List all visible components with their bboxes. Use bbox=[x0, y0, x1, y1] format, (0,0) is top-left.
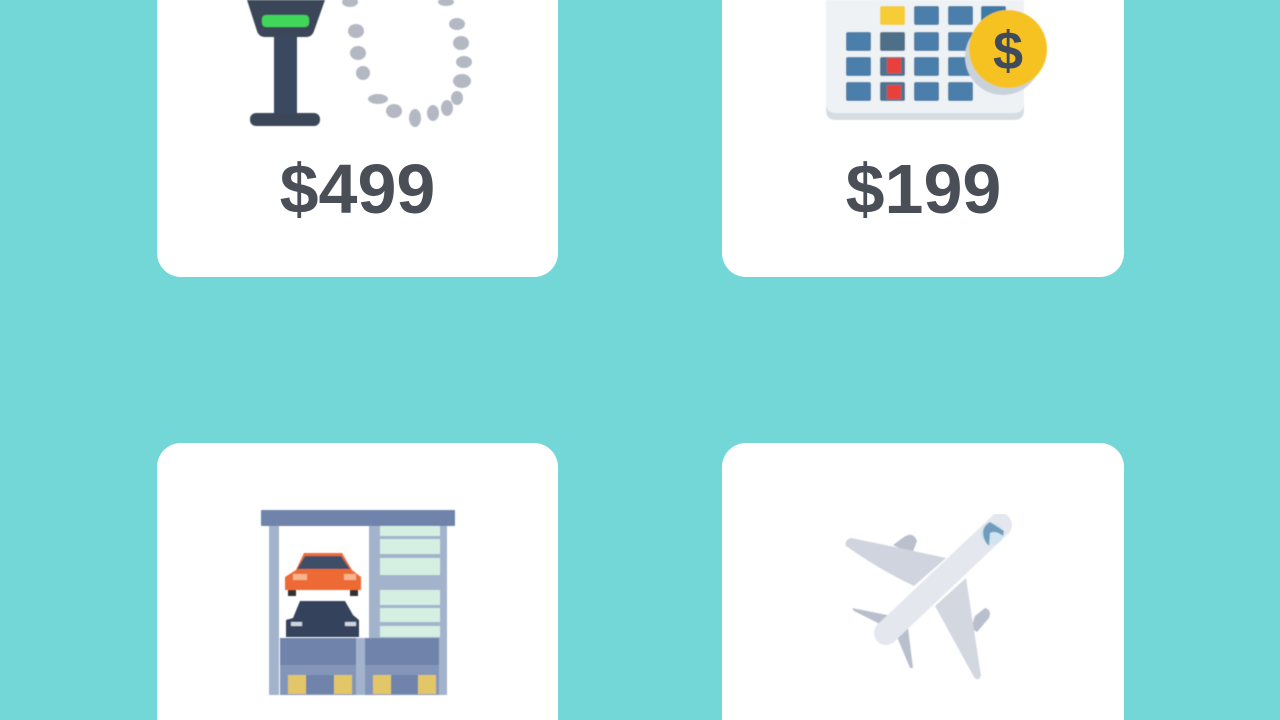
price: $199: $199 bbox=[846, 150, 1001, 228]
panel: parking meter card bbox=[157, 0, 558, 277]
icon: airplane bbox=[846, 522, 1004, 679]
icon: parking garage bbox=[261, 510, 455, 695]
panel: calendar card bbox=[722, 0, 1124, 277]
icon: dollar sign: $ bbox=[993, 21, 1023, 81]
panel: parking garage card bbox=[157, 443, 558, 720]
icon: parking meter bbox=[247, 0, 325, 126]
panel: airplane card bbox=[722, 443, 1124, 720]
icon: calendar with dollar coin bbox=[826, 0, 1047, 120]
icon: dark car bbox=[286, 601, 359, 637]
icon: orange car bbox=[285, 553, 361, 596]
icon: dotted circle bbox=[342, 0, 472, 127]
garage lower bays bbox=[280, 638, 439, 695]
price: $499: $499 bbox=[280, 150, 435, 228]
